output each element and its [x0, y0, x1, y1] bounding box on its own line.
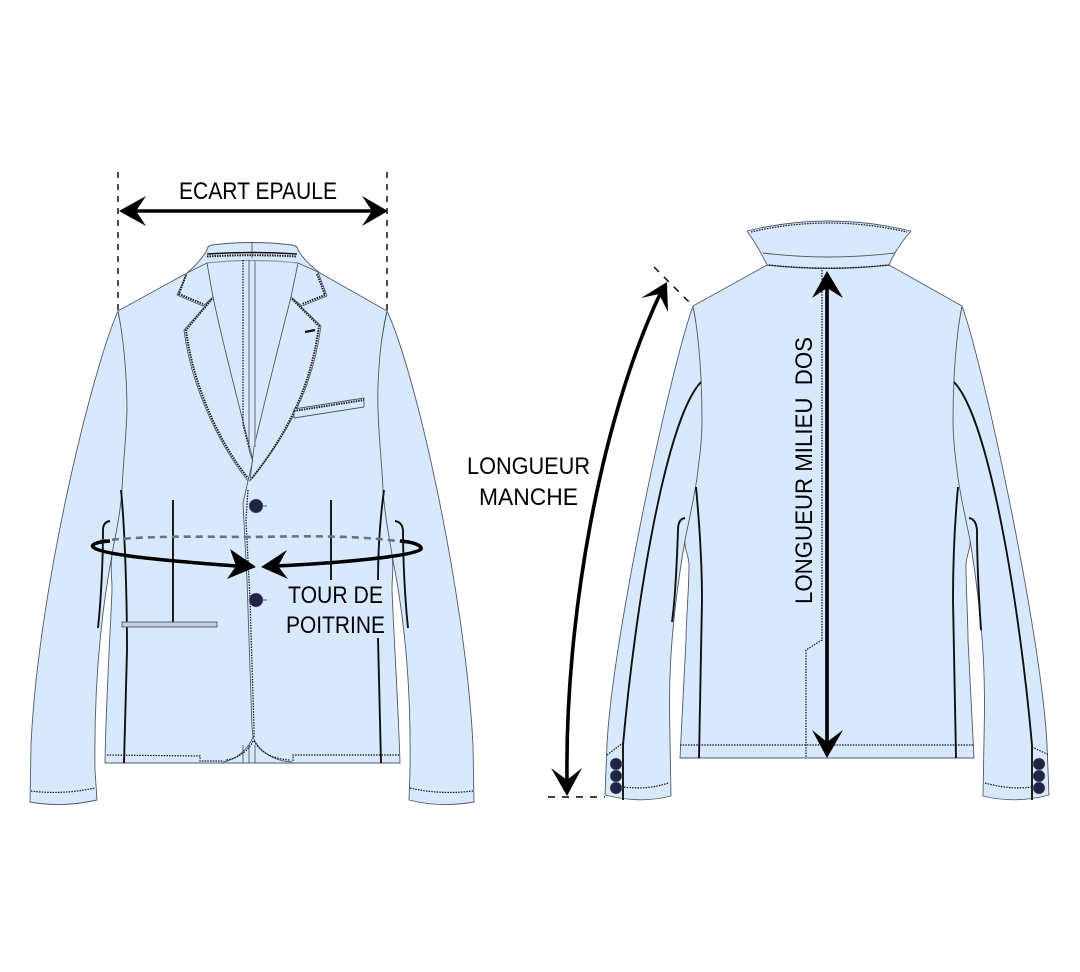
back collar [747, 221, 911, 268]
label: chest [286, 582, 385, 639]
chest dashed line [100, 536, 412, 543]
label: sleeve length [467, 453, 590, 511]
arrow: back length [812, 271, 843, 758]
front placket [223, 481, 292, 763]
back body [680, 265, 974, 758]
cuff details [607, 743, 1049, 794]
arrow: shoulder width [118, 172, 388, 310]
chest pocket [294, 398, 364, 418]
label: sleeve length: LONGUEUR [467, 453, 590, 480]
left back sleeve [605, 306, 710, 800]
cuff stitching [31, 788, 473, 792]
back centre stitching [806, 270, 822, 758]
arrow: sleeve length [548, 267, 693, 797]
right back sleeve [945, 306, 1049, 800]
back jacket [605, 221, 1049, 800]
label: shoulder width: ECART EPAULE [179, 178, 337, 205]
lower pocket [122, 622, 217, 627]
arrow: chest [93, 541, 421, 579]
label: sleeve length: MANCHE [479, 484, 578, 511]
collar and lapels [177, 243, 327, 481]
front jacket [30, 242, 474, 805]
seams and darts [98, 490, 408, 763]
buttons [249, 499, 267, 607]
left sleeve [30, 311, 135, 805]
back seams [623, 382, 1032, 800]
back hem stitching [680, 744, 974, 746]
label: chest: POITRINE [286, 612, 385, 639]
hem stitching [107, 755, 399, 761]
label: back length: LONGUEUR MILIEU DOS [791, 337, 818, 604]
right sleeve [370, 311, 474, 805]
jacket body [105, 242, 400, 763]
label: chest: TOUR DE [288, 582, 383, 609]
boutonniere [305, 330, 315, 332]
